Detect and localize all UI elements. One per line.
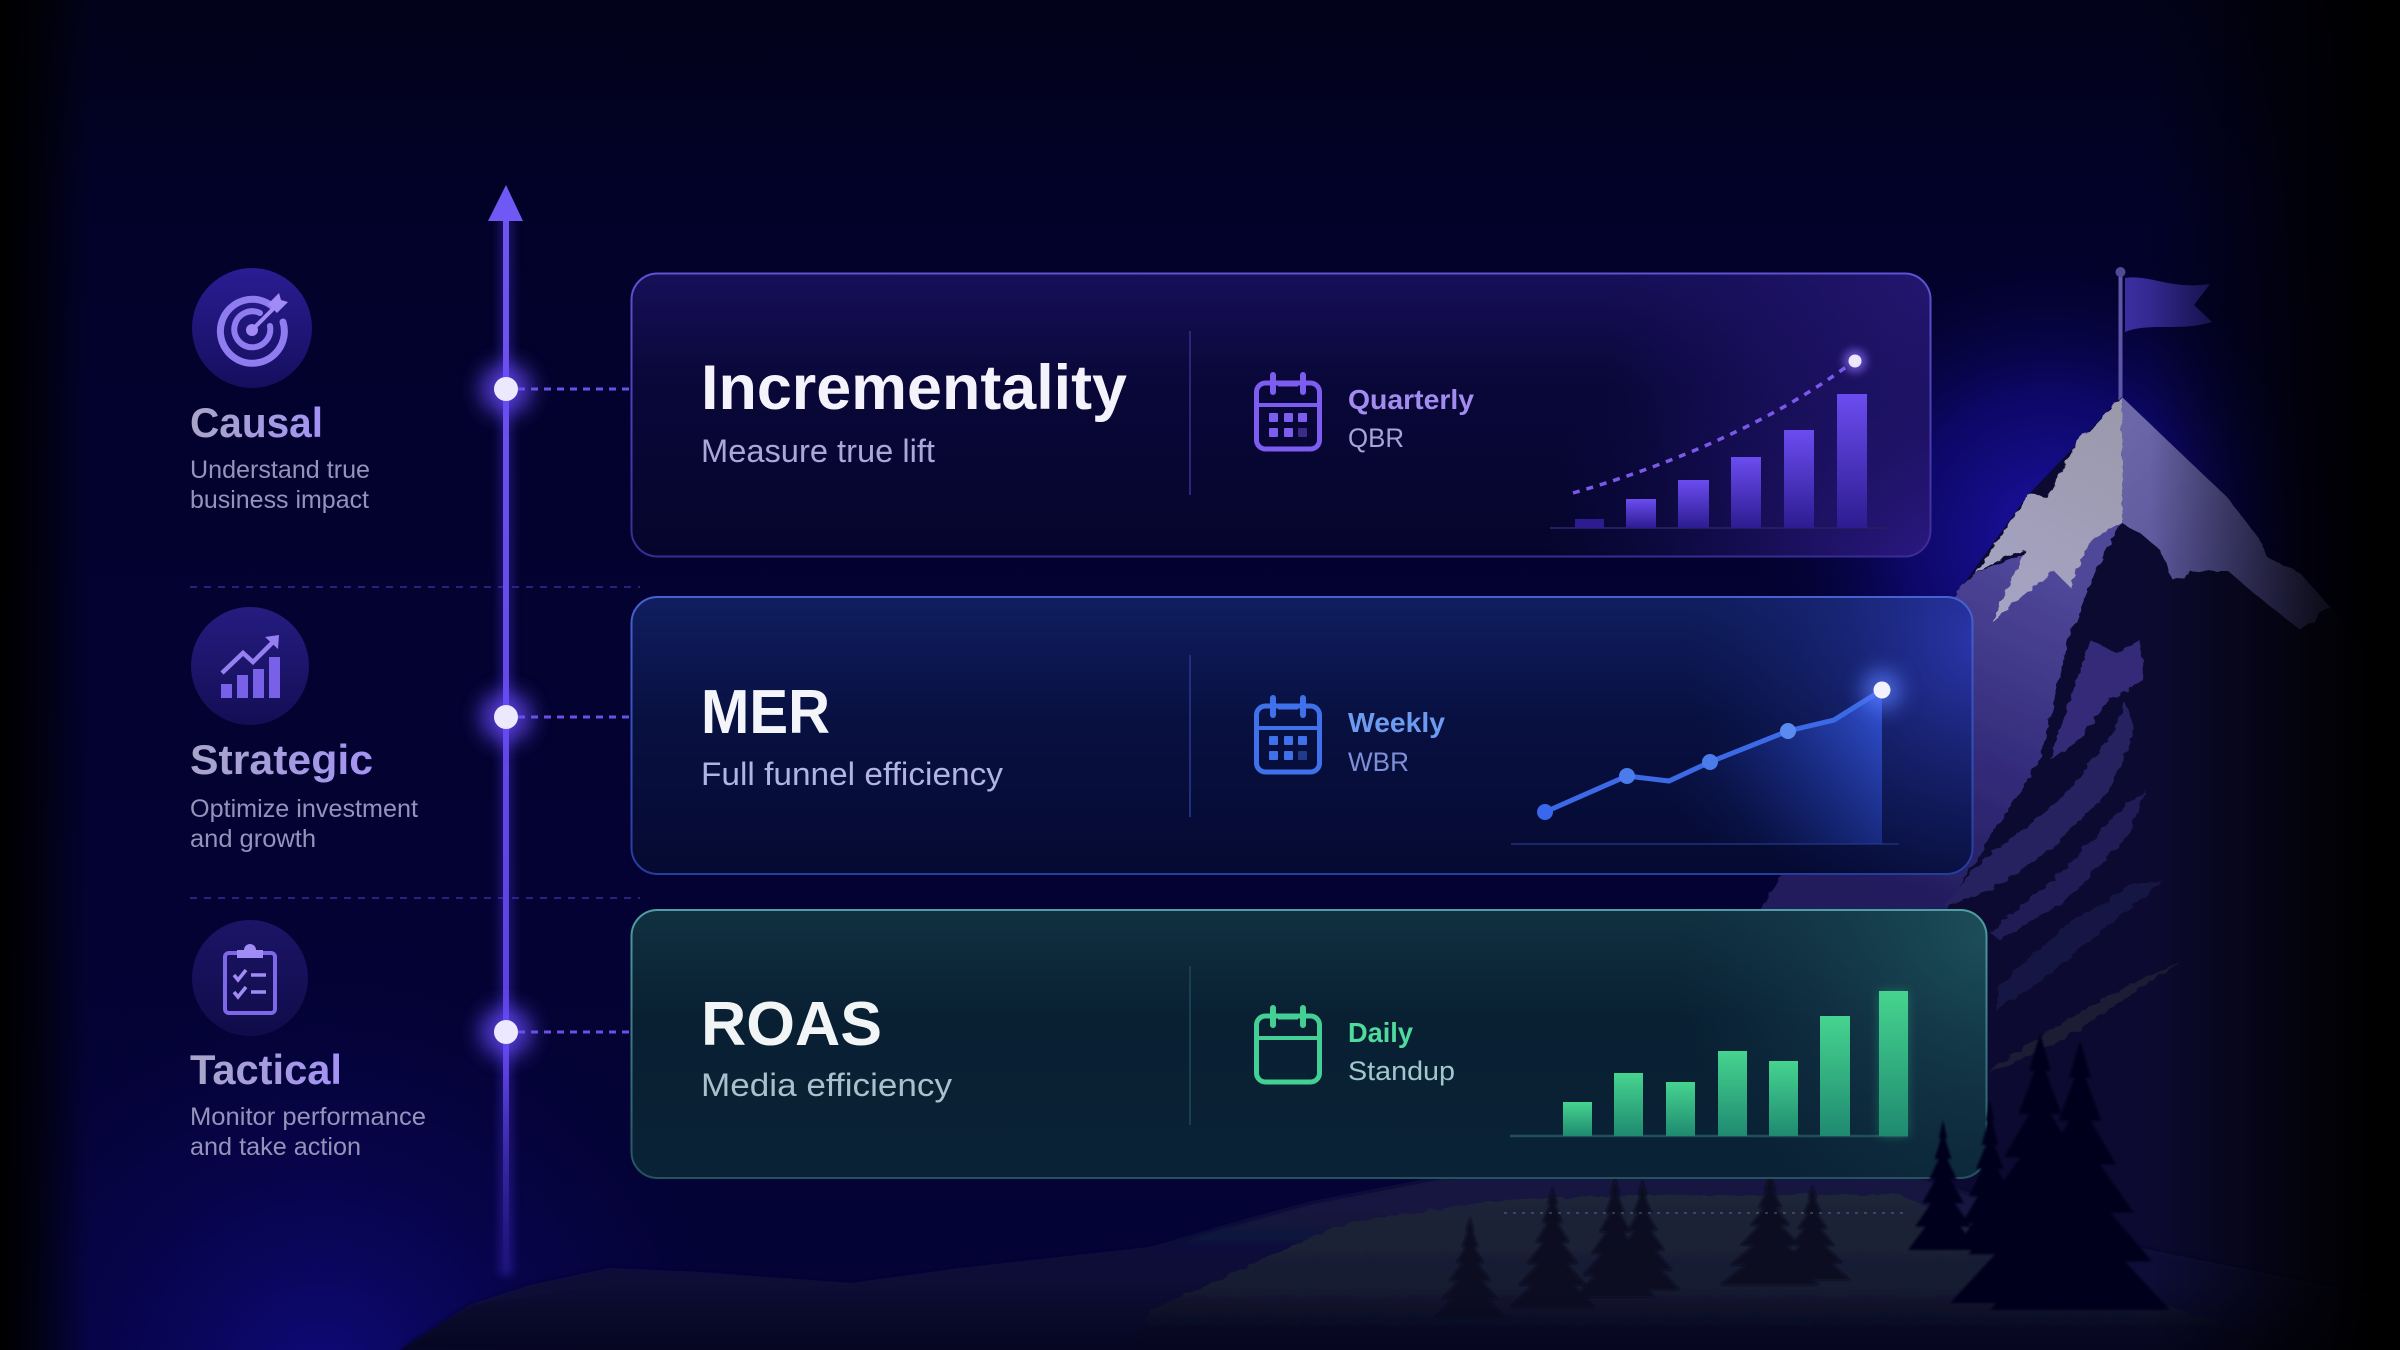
description: tactical: Monitor performance <box>190 1103 426 1131</box>
cadence: quarterly QBR: QBR <box>1348 423 1404 453</box>
level: strategic <box>190 607 418 853</box>
title: MER: MER <box>701 678 830 747</box>
node: strategic <box>480 691 631 743</box>
cadence: quarterly QBR: Quarterly <box>1348 384 1474 415</box>
heading: tactical: Tactical <box>190 1046 342 1093</box>
mountain snow cap <box>1975 397 2330 630</box>
mountain left lit face <box>1760 523 2183 1073</box>
heading: causal: Causal <box>190 399 323 446</box>
level: tactical <box>190 920 426 1161</box>
description: causal: business impact <box>190 486 369 514</box>
subtitle: media efficiency: Media efficiency <box>701 1067 952 1103</box>
description: strategic: and growth <box>190 825 316 853</box>
cadence: quarterly QBR <box>1348 384 1474 453</box>
panel: incrementality <box>632 274 1930 556</box>
icon: checklist clipboard <box>192 920 308 1036</box>
axis nodes and connectors <box>480 363 631 1058</box>
back forest <box>1435 1175 1850 1317</box>
cadence: weekly WBR: WBR <box>1348 747 1409 777</box>
icon: target <box>192 268 312 388</box>
description: strategic: Optimize investment <box>190 795 418 823</box>
mountain base <box>1600 397 2400 1300</box>
foreground dark slope <box>400 1285 2400 1350</box>
foothill terrain <box>400 1170 2400 1350</box>
cadence: daily standup <box>1348 1017 1455 1086</box>
panel: MER <box>632 597 1972 874</box>
icon: weekly calendar <box>1256 698 1320 772</box>
bar chart: daily green bars <box>1510 991 1908 1136</box>
icon: growth chart <box>191 607 309 725</box>
faint dotted line on hillside <box>1504 1212 1909 1214</box>
flag <box>2116 267 2212 400</box>
cadence: weekly WBR: Weekly <box>1348 707 1445 738</box>
cadence: daily standup: Standup <box>1348 1056 1455 1086</box>
subtitle: measure true lift: Measure true lift <box>701 433 935 469</box>
node: causal <box>480 363 631 415</box>
description: causal: Understand true <box>190 456 370 484</box>
level separators <box>190 587 640 898</box>
vertical axis arrow <box>488 185 523 1285</box>
foreground pine trees <box>1908 1033 2170 1310</box>
panel: ROAS <box>632 910 1986 1178</box>
heading: strategic: Strategic <box>190 736 373 783</box>
bar chart: rising bars with trend <box>1550 349 1890 528</box>
title: incrementality: Incrementality <box>701 353 1127 423</box>
description: tactical: and take action <box>190 1133 361 1161</box>
icon: quarterly calendar <box>1256 375 1320 449</box>
title: ROAS: ROAS <box>701 990 882 1059</box>
cadence: daily standup: Daily <box>1348 1017 1413 1048</box>
subtitle: full funnel efficiency: Full funnel efficiency <box>701 756 1003 792</box>
line chart: weekly trend <box>1511 670 1902 844</box>
icon: daily calendar <box>1256 1008 1320 1082</box>
node: tactical <box>480 1006 631 1058</box>
cadence: weekly WBR <box>1348 707 1445 777</box>
level: causal <box>190 268 370 514</box>
mountain with flag <box>400 267 2400 1350</box>
